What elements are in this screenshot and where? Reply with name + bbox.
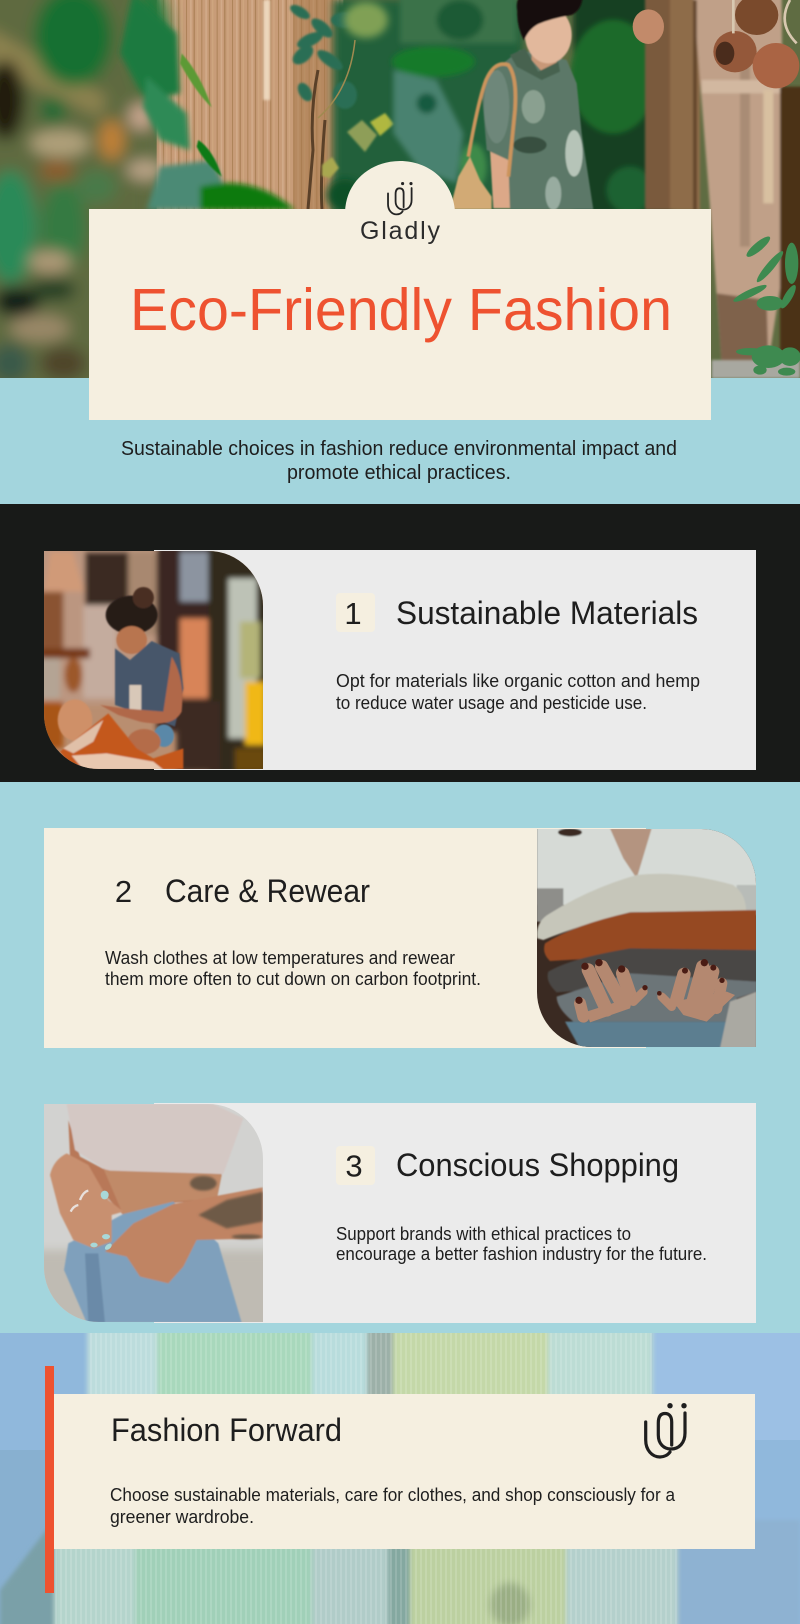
heading: Fashion Forward [111, 1412, 342, 1448]
body text: Opt for materials like organic cotton and hemp [336, 671, 700, 691]
photo: hands holding folded sweaters [530, 825, 760, 1055]
body text: encourage a better fashion industry for the future. [336, 1244, 707, 1264]
nails [575, 959, 725, 1004]
body text: Choose sustainable materials, care for clothes, and shop consciously for a [110, 1485, 676, 1505]
body text: to reduce water usage and pesticide use. [336, 693, 647, 713]
fingers [580, 967, 722, 1017]
black section background [0, 504, 800, 782]
heading: Care & Rewear [165, 873, 370, 909]
photo: torso with denim jeans [44, 1104, 263, 1322]
heading: Sustainable Materials [396, 595, 698, 631]
hanging gourds [633, 0, 799, 88]
intro text: promote ethical practices. [287, 462, 511, 484]
number 2: 2 [115, 874, 132, 909]
brand name: Gladly [360, 217, 440, 245]
footer photo: hanging shirts with blue tint [0, 1320, 800, 1624]
body text: Support brands with ethical practices to [336, 1224, 631, 1244]
mid garden foliage and vines [288, 0, 523, 215]
panel: step 3 conscious shopping [33, 1100, 756, 1337]
hero photo: woman walking in garden [0, 0, 800, 400]
woman with shoulder bag [450, 0, 593, 210]
body text [105, 948, 481, 989]
body text [336, 671, 700, 713]
footer accent bar [45, 1366, 54, 1593]
intro text: Sustainable choices in fashion reduce environmental impact and [121, 438, 677, 460]
background bush [392, 0, 673, 213]
panel: fashion forward [54, 1394, 755, 1549]
tree trunks [645, 0, 800, 363]
body text [336, 1224, 707, 1264]
icon: Gladly logo mark [388, 182, 413, 214]
ground plants [712, 234, 800, 378]
photo: woman sewing orange fabric [44, 551, 263, 769]
heading: Conscious Shopping [396, 1147, 679, 1183]
body text [110, 1485, 676, 1527]
number badge 1 [336, 593, 375, 632]
title: Eco-Friendly Fashion [130, 277, 672, 343]
nails and rings [90, 1191, 113, 1251]
body text: Wash clothes at low temperatures and rewear [105, 948, 455, 968]
body text: greener wardrobe. [110, 1507, 254, 1527]
title card [89, 161, 711, 420]
intro text [121, 438, 677, 484]
number badge 3 [336, 1146, 375, 1185]
panel: step 1 sustainable materials [40, 545, 756, 778]
number badge 1: 1 [344, 596, 362, 631]
body text: them more often to cut down on carbon footprint. [105, 969, 481, 989]
teal intro band [0, 378, 800, 504]
logo tab semicircle [345, 161, 455, 212]
panel: step 2 care and rewear [44, 825, 760, 1055]
number badge 3: 3 [345, 1148, 363, 1184]
icon: Gladly logo mark [646, 1403, 687, 1457]
